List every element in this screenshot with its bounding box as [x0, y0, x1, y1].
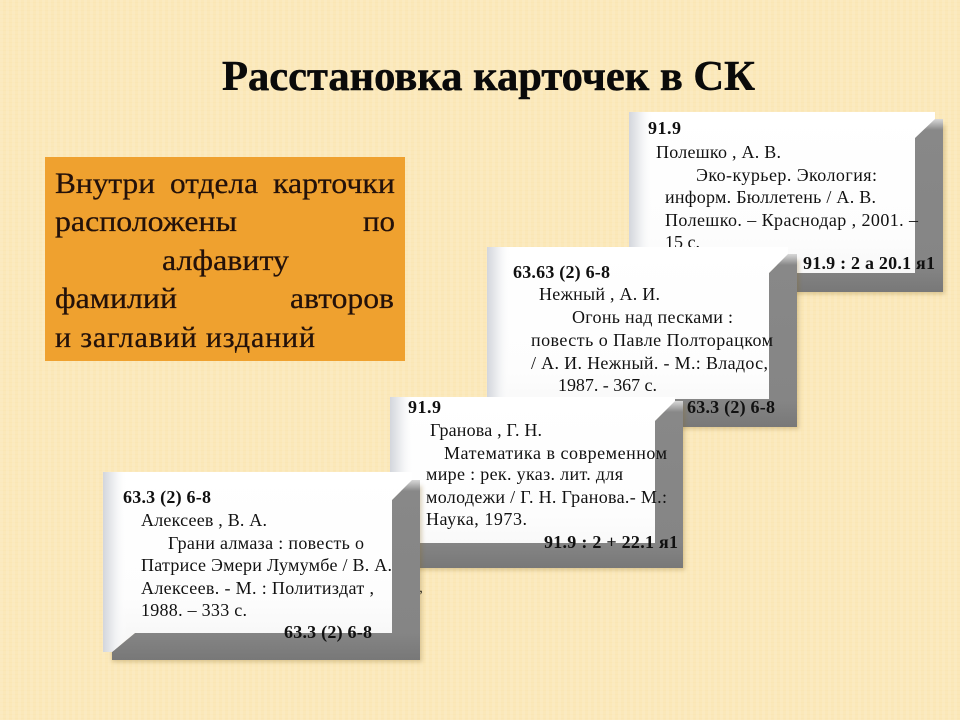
card 4 text: Патрисе Эмери Лумумбе / В. А. [141, 555, 392, 575]
card 4: Алексеев [103, 472, 422, 662]
card 4 text: Алексеев. - М. : Политиздат , [141, 578, 374, 598]
card 2 text: 1987. - 367 с. [558, 375, 657, 395]
card 1 text: Полешко , А. В. [656, 142, 781, 162]
panel: orange explanation box: расположены [55, 205, 237, 238]
card 3 text [408, 397, 678, 552]
card 4 text: Алексеев , В. А. [141, 510, 267, 530]
card 1: Полешко [629, 112, 945, 294]
card 3 text: молодежи / Г. Н. Гранова.- М.: [426, 487, 667, 507]
card 3 text: Математика в современном [444, 443, 667, 463]
panel: orange explanation box: фамилий [55, 282, 177, 315]
card 4 text: Грани алмаза : повесть о [168, 533, 364, 553]
card 2 text: Огонь над песками : [572, 307, 733, 327]
card 4 text: 1988. – 333 с. [141, 600, 247, 620]
stray comma: , [419, 579, 423, 596]
card 1 text: Полешко. – Краснодар , 2001. – [665, 210, 919, 230]
card 2 text: 63.63 (2) 6-8 [513, 262, 610, 283]
card 3: Гранова [390, 397, 685, 570]
card 3 text: Гранова , Г. Н. [430, 420, 542, 440]
title: Расстановка карточек в СК [222, 54, 756, 100]
card 2 text [513, 262, 775, 418]
card 3 text: 91.9 : 2 + 22.1 я1 [544, 532, 678, 552]
panel: orange explanation box [45, 157, 405, 361]
panel: orange explanation box: алфавиту [162, 244, 289, 277]
card 3 text: мире : рек. указ. лит. для [426, 464, 623, 484]
panel: orange explanation box: отдела [170, 167, 258, 200]
card 4 text: 63.3 (2) 6-8 [284, 622, 372, 643]
card 4 text [123, 487, 392, 643]
panel: orange explanation box: карточки [273, 167, 395, 200]
card 1 text: 91.9 [648, 118, 681, 138]
panel: orange explanation box: Внутри [55, 167, 155, 200]
card 4 text: 63.3 (2) 6-8 [123, 487, 211, 508]
card 2: Нежный [487, 247, 799, 429]
card 2 text: / А. И. Нежный. - М.: Владос, [531, 353, 768, 373]
card 1 text [648, 118, 935, 273]
card 1 text: Эко-курьер. Экология: [696, 165, 877, 185]
card 1 text: информ. Бюллетень / А. В. [665, 187, 876, 207]
card 3 text: 91.9 [408, 397, 441, 417]
card 2 text: 63.3 (2) 6-8 [687, 397, 775, 418]
panel: orange explanation box: авторов [290, 282, 394, 315]
card 2 text: Нежный , А. И. [539, 284, 660, 304]
card 3 text: Наука, 1973. [426, 509, 527, 529]
card 2 text: повесть о Павле Полторацком [531, 330, 773, 350]
panel: orange explanation box: и заглавий изданий [55, 321, 315, 354]
card 1 text: 91.9 : 2 а 20.1 я1 [803, 253, 935, 273]
card 1 text: 15 с. [665, 232, 700, 252]
panel: orange explanation box: по [363, 205, 395, 238]
